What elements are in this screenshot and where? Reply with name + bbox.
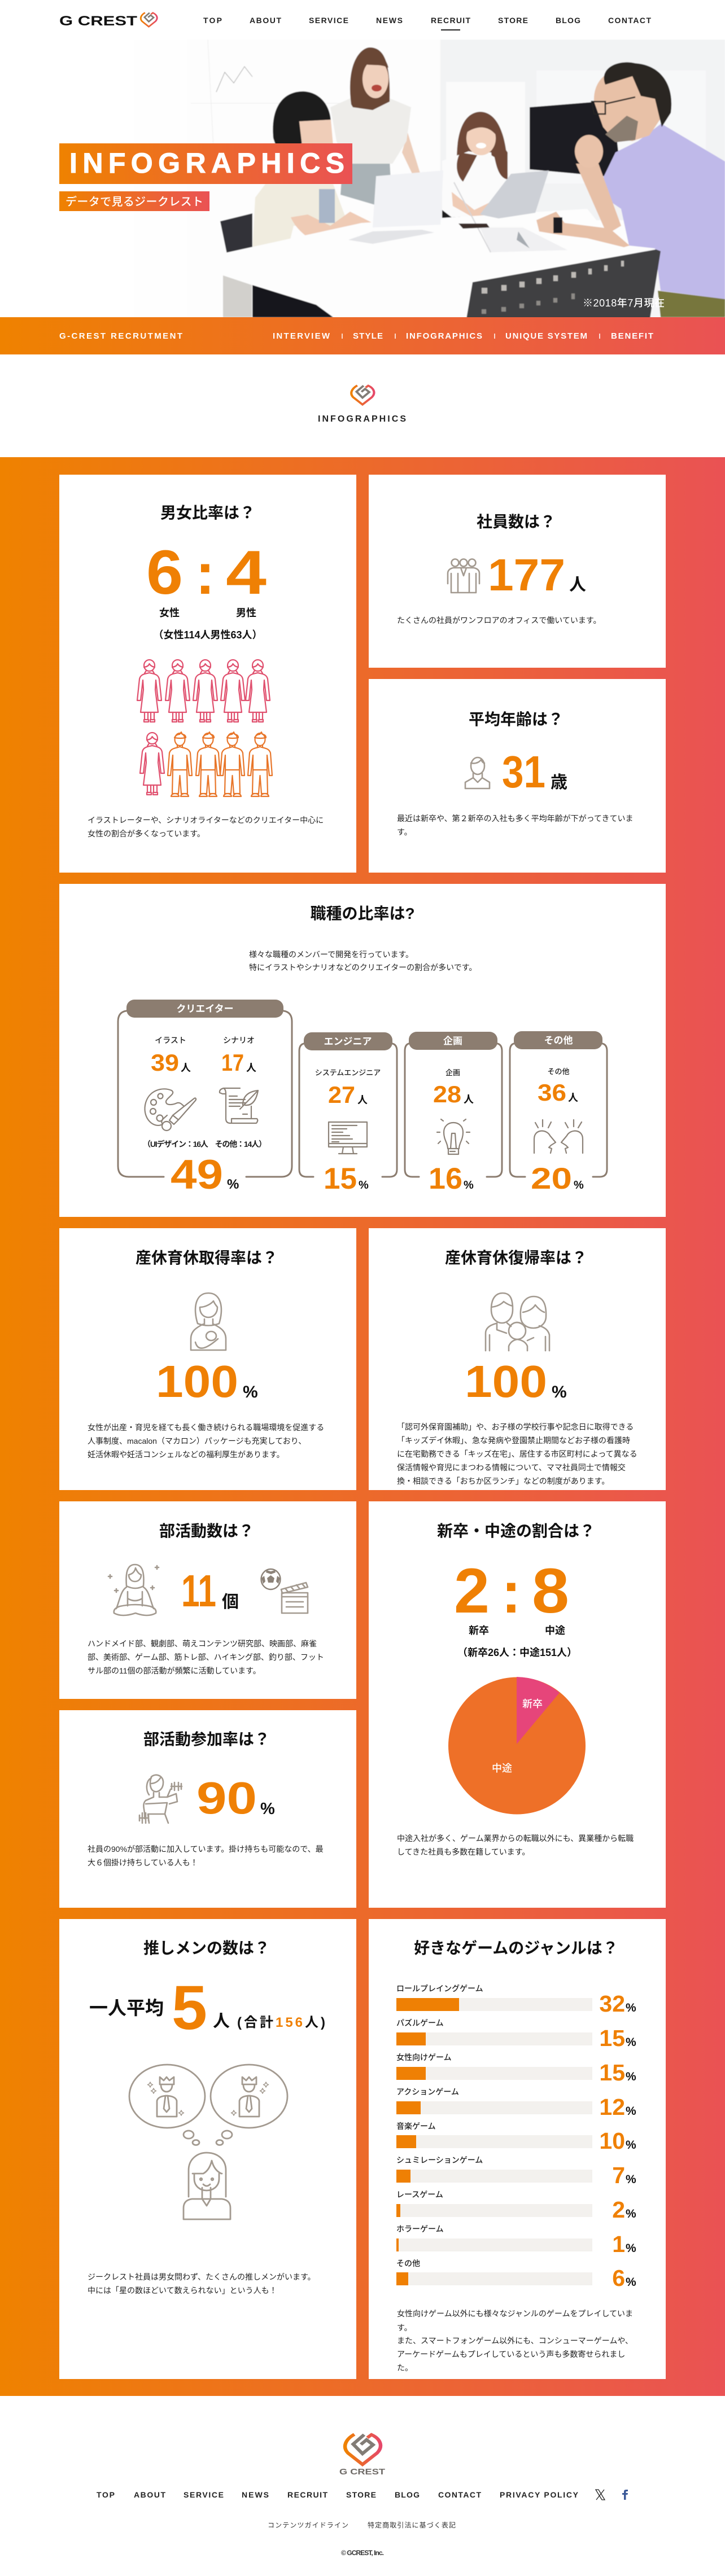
heading: 好きなゲームのジャンルは？ bbox=[414, 1939, 618, 1957]
pie chart: 中途 bbox=[492, 1763, 512, 1774]
bar: other: 6 bbox=[612, 2265, 625, 2291]
footer bbox=[97, 2434, 628, 2557]
header bar bbox=[0, 0, 725, 40]
column: engineers: 27 bbox=[328, 1081, 355, 1108]
panel: favourite idols count bbox=[59, 1919, 356, 2379]
recruitment sub navigation band bbox=[0, 317, 725, 354]
icon: soccer ball bbox=[261, 1569, 280, 1589]
heading: 新卒・中途の割合は？ bbox=[437, 1522, 595, 1540]
column: creators: 39 bbox=[151, 1049, 179, 1076]
bar: role playing bbox=[396, 1984, 636, 2017]
bar: music: 音楽ゲーム bbox=[396, 2122, 436, 2131]
column: creators: 人 bbox=[181, 1062, 191, 1074]
description: す。 bbox=[397, 2323, 412, 2332]
description: サル部の11個の部活動が頻繁に活動しています。 bbox=[88, 1666, 261, 1675]
global navigation: CONTACT bbox=[608, 16, 651, 25]
bar: action bbox=[396, 2087, 636, 2120]
description: 「キッズデイ休暇」、急な発病や登園禁止期間などお子様の看護時 bbox=[397, 1436, 630, 1445]
column: creators: 17 bbox=[221, 1049, 244, 1076]
average count text: 一人平均 bbox=[89, 1997, 164, 2018]
bar: horror: ホラーゲーム bbox=[396, 2224, 444, 2233]
footer logo bbox=[339, 2434, 385, 2477]
recruitment sub navigation band: INTERVIEW bbox=[273, 331, 330, 341]
seated man bbox=[252, 184, 345, 247]
bar: horror bbox=[396, 2224, 636, 2257]
footer links bbox=[268, 2521, 456, 2529]
bar: puzzle: パズルゲーム bbox=[396, 2018, 444, 2027]
bar: simulation: % bbox=[626, 2173, 636, 2186]
recruitment sub navigation band: BENEFIT bbox=[611, 331, 653, 341]
labels bbox=[153, 607, 263, 641]
column: planners: 企画 bbox=[443, 1035, 462, 1046]
description: 女性の割合が多くなっています。 bbox=[88, 829, 205, 838]
icon: palette and brush bbox=[145, 1089, 196, 1131]
hero subtitle bbox=[59, 191, 209, 211]
bar: racing: % bbox=[626, 2207, 636, 2220]
ratio 6:4: : bbox=[195, 541, 215, 607]
hero photo: team around a table bbox=[193, 40, 725, 317]
column: planners: 企画 bbox=[446, 1068, 460, 1077]
column: planners bbox=[405, 1032, 502, 1195]
bar: racing: 2 bbox=[612, 2197, 625, 2223]
heading: 産休育休取得率は？ bbox=[136, 1249, 278, 1267]
heading: 産休育休復帰率は？ bbox=[445, 1249, 587, 1267]
labels: 男性 bbox=[236, 607, 256, 619]
description bbox=[88, 1639, 324, 1675]
column: creators: シナリオ bbox=[223, 1036, 255, 1045]
bar: action: % bbox=[626, 2105, 636, 2118]
table bbox=[226, 209, 595, 255]
bar: action: 12 bbox=[599, 2094, 625, 2120]
description: 大６個掛け持ちしている人も！ bbox=[88, 1858, 198, 1867]
panel: job type ratio bbox=[59, 884, 666, 1217]
icon: meditating woman bbox=[108, 1565, 159, 1615]
description: ジークレスト社員は男女問わず、たくさんの推しメンがいます。 bbox=[88, 2272, 316, 2281]
footer logo: G CREST bbox=[339, 2467, 385, 2477]
recruitment sub navigation band: G-CREST RECRUTMENT bbox=[59, 331, 182, 341]
column: others: 20 bbox=[531, 1162, 572, 1195]
column: others: その他 bbox=[547, 1067, 570, 1076]
description bbox=[88, 2272, 316, 2295]
bar: role playing: % bbox=[626, 2001, 636, 2014]
description: 人事制度、macalon（マカロン）パッケージも充実しており、 bbox=[88, 1436, 306, 1445]
description: 特にイラストやシナリオなどのクリエイターの割合が多いです。 bbox=[249, 963, 477, 972]
description: 換・相談できる「おちか区ランチ」などの制度があります。 bbox=[397, 1477, 609, 1486]
ratio 6:4: 6 bbox=[146, 538, 183, 607]
heading: 職種の比率は? bbox=[310, 905, 415, 922]
bar: role playing: ロールプレイングゲーム bbox=[396, 1984, 483, 1993]
footer navigation: STORE bbox=[346, 2490, 376, 2499]
hero subtitle: データで見るジークレスト bbox=[65, 195, 203, 208]
description bbox=[397, 1834, 634, 1856]
panel: gender ratio bbox=[59, 475, 356, 873]
ratio 2:8: 2 bbox=[454, 1556, 490, 1626]
column: creators bbox=[118, 1000, 292, 1198]
icon: person bbox=[465, 757, 490, 788]
bar: simulation: シュミレーションゲーム bbox=[396, 2156, 483, 2165]
description: アーケードゲームもプレイしているという声も多数寄せられまし bbox=[397, 2350, 625, 2359]
value 100%: 100 bbox=[156, 1356, 238, 1407]
count 11: 11 bbox=[181, 1566, 216, 1616]
panel: number of clubs bbox=[59, 1501, 356, 1699]
footer navigation: CONTACT bbox=[438, 2490, 481, 2499]
description: また、スマートフォンゲーム以外にも、コンシューマーゲームや、 bbox=[397, 2336, 633, 2345]
description: ハンドメイド部、観劇部、萌えコンテンツ研究部、映画部、麻雀 bbox=[88, 1639, 317, 1648]
icon: scroll and quill bbox=[220, 1088, 258, 1123]
description: 中途入社が多く、ゲーム業界からの転職以外にも、異業種から転職 bbox=[397, 1834, 634, 1843]
icon: woman with dumbbells bbox=[139, 1775, 182, 1823]
age 31: 歳 bbox=[551, 773, 567, 792]
column: others: その他 bbox=[544, 1035, 573, 1046]
bar: other: その他 bbox=[396, 2259, 420, 2268]
icon: two people talking bbox=[534, 1120, 583, 1153]
column: planners: 16 bbox=[429, 1162, 462, 1195]
column: creators: % bbox=[227, 1177, 239, 1192]
description: た。 bbox=[397, 2363, 413, 2372]
description: してきた社員も多数在籍しています。 bbox=[397, 1847, 530, 1856]
value 90%: % bbox=[260, 1800, 275, 1818]
bar: puzzle bbox=[396, 2018, 636, 2051]
description: たくさんの社員がワンフロアのオフィスで働いています。 bbox=[397, 616, 601, 625]
global navigation: BLOG bbox=[556, 16, 580, 25]
footer navigation: TOP bbox=[97, 2490, 115, 2499]
bar: for women: 女性向けゲーム bbox=[396, 2053, 452, 2062]
average count text: (合計156人) bbox=[237, 2015, 325, 2030]
ratio 6:4: 4 bbox=[226, 538, 267, 607]
heading: 平均年齢は？ bbox=[469, 711, 564, 728]
description: 社員の90%が部活動に加入しています。掛け持ちも可能なので、最 bbox=[88, 1845, 324, 1854]
left chair bbox=[220, 213, 252, 254]
global navigation: TOP bbox=[203, 16, 222, 25]
description: イラストレーターや、シナリオライターなどのクリエイター中心に bbox=[88, 816, 324, 825]
column: creators: クリエイター bbox=[176, 1004, 234, 1014]
average count text: 人 bbox=[213, 2012, 230, 2031]
bar: horror: 1 bbox=[612, 2231, 625, 2257]
labels bbox=[457, 1625, 577, 1658]
column: planners: 人 bbox=[464, 1094, 474, 1105]
footer navigation: ABOUT bbox=[134, 2490, 165, 2499]
recruitment sub navigation band: INFOGRAPHICS bbox=[406, 331, 482, 341]
panel: average age bbox=[369, 679, 666, 873]
average count text bbox=[89, 1973, 325, 2043]
bar: music bbox=[396, 2122, 636, 2154]
description bbox=[88, 816, 324, 838]
icon: light bulb bbox=[437, 1119, 470, 1154]
column: creators: イラスト bbox=[155, 1036, 186, 1045]
icon: X social bbox=[596, 2490, 605, 2500]
global navigation bbox=[203, 16, 651, 30]
description bbox=[88, 1845, 324, 1867]
description: 中には「星の数ほどいて数えられない」という人も！ bbox=[88, 2286, 277, 2295]
column: creators: 49 bbox=[171, 1152, 223, 1198]
bar: for women: 15 bbox=[599, 2060, 625, 2086]
labels: 新卒 bbox=[469, 1625, 489, 1636]
column: engineers bbox=[299, 1032, 397, 1195]
description bbox=[249, 950, 477, 972]
description: 最近は新卒や、第２新卒の入社も多く平均年齢が下がってきていま bbox=[397, 814, 633, 823]
description: 保活情報や育児にまつわる情報について、ママ社員同士で情報交 bbox=[397, 1463, 626, 1472]
icon: thought bubbles with crowned idols bbox=[129, 2065, 287, 2219]
icon: family bbox=[486, 1293, 549, 1351]
bar: other bbox=[396, 2259, 636, 2291]
global navigation: RECRUIT bbox=[431, 16, 470, 25]
icon: clapperboard bbox=[281, 1583, 308, 1613]
global navigation: SERVICE bbox=[309, 16, 348, 25]
column: engineers: 15 bbox=[324, 1162, 357, 1195]
footer navigation: RECRUIT bbox=[287, 2490, 327, 2499]
labels: 女性 bbox=[159, 607, 180, 619]
panel: return from parental leave bbox=[369, 1228, 666, 1490]
footer navigation: BLOG bbox=[395, 2490, 420, 2499]
bar: for women bbox=[396, 2053, 636, 2086]
standing woman bbox=[340, 163, 391, 205]
count 11: 個 bbox=[222, 1593, 239, 1611]
column: engineers: システムエンジニア bbox=[315, 1068, 381, 1077]
panel: number of employees bbox=[369, 475, 666, 668]
panel: club participation rate bbox=[59, 1710, 356, 1908]
panel: parental leave take-up bbox=[59, 1228, 356, 1490]
footer links: コンテンツガイドライン bbox=[268, 2521, 348, 2529]
footer navigation: SERVICE bbox=[184, 2490, 224, 2499]
heading: 社員数は？ bbox=[477, 513, 556, 531]
description bbox=[397, 2309, 633, 2372]
panel: favourite game genres bbox=[369, 1919, 666, 2379]
description: 妊活休暇や妊活コンシェルなどの福利厚生があります。 bbox=[88, 1450, 285, 1459]
column: creators: （UIデザイン：16人 その他：14人） bbox=[143, 1140, 267, 1149]
global navigation: ABOUT bbox=[250, 16, 281, 25]
column: creators: 人 bbox=[246, 1062, 256, 1074]
column: others: 人 bbox=[568, 1092, 578, 1103]
value 100%: 100 bbox=[465, 1356, 547, 1407]
column: planners: % bbox=[464, 1179, 474, 1191]
icon: monitor bbox=[329, 1122, 367, 1154]
panel: new graduate vs mid-career ratio bbox=[369, 1501, 666, 1908]
section heading: INFOGRAPHICS with logo mark bbox=[318, 385, 406, 424]
labels: （女性114人男性63人） bbox=[153, 629, 263, 641]
average count text: 5 bbox=[172, 1973, 207, 2043]
bar: music: 10 bbox=[599, 2128, 625, 2154]
section heading: INFOGRAPHICS with logo mark: INFOGRAPHICS bbox=[318, 414, 406, 424]
bar: role playing: 32 bbox=[599, 1991, 625, 2017]
heading: 部活動数は？ bbox=[159, 1522, 254, 1540]
description: に在宅勤務できる「キッズ在宅」、居住する市区町村によって異なる bbox=[397, 1449, 637, 1458]
value 90%: 90 bbox=[196, 1773, 257, 1823]
column: others: % bbox=[574, 1179, 584, 1191]
heading: 部活動参加率は？ bbox=[143, 1731, 270, 1748]
value 100%: % bbox=[243, 1383, 258, 1401]
value 90% bbox=[196, 1773, 275, 1823]
ratio 2:8: 8 bbox=[532, 1556, 569, 1626]
global navigation: STORE bbox=[498, 16, 528, 25]
logo: G CREST: G CREST bbox=[59, 14, 137, 29]
description: 「認可外保育園補助」や、お子様の学校行事や記念日に取得できる bbox=[397, 1422, 634, 1431]
laptops bbox=[480, 170, 549, 218]
icon: ten people bbox=[137, 660, 272, 796]
age 31: 31 bbox=[502, 747, 545, 797]
count 177: 人 bbox=[569, 576, 586, 594]
column: engineers: % bbox=[359, 1179, 369, 1191]
seated woman bbox=[442, 210, 455, 218]
icon: Facebook bbox=[622, 2490, 628, 2500]
logo: G CREST bbox=[59, 12, 157, 29]
copyright: © GCREST, Inc. bbox=[341, 2549, 384, 2557]
footer links: 特定商取引法に基づく表記 bbox=[368, 2521, 456, 2529]
labels: （新卒26人：中途151人） bbox=[457, 1647, 577, 1658]
value 100%: % bbox=[552, 1383, 567, 1401]
column: engineers: エンジニア bbox=[324, 1036, 372, 1047]
bar: music: % bbox=[626, 2139, 636, 2152]
description: 女性向けゲーム以外にも様々なジャンルのゲームをプレイしていま bbox=[397, 2309, 633, 2318]
description: 様々な職種のメンバーで開発を行っています。 bbox=[249, 950, 413, 959]
bar: simulation bbox=[396, 2156, 636, 2188]
column: planners: 28 bbox=[433, 1081, 461, 1107]
foreground chair bbox=[466, 249, 661, 319]
footer navigation bbox=[97, 2490, 579, 2499]
footer navigation: PRIVACY POLICY bbox=[500, 2490, 579, 2499]
pie chart bbox=[448, 1677, 586, 1814]
heading: 男女比率は？ bbox=[160, 504, 255, 522]
icon: mother and baby bbox=[191, 1293, 226, 1350]
global navigation: NEWS bbox=[376, 16, 403, 25]
man with glasses bbox=[596, 124, 725, 299]
recruitment sub navigation band: UNIQUE SYSTEM bbox=[505, 331, 587, 341]
bar chart bbox=[396, 1984, 636, 2291]
description: 女性が出産・育児を経ても長く働き続けられる職場環境を促進する bbox=[88, 1423, 324, 1432]
pie chart: 新卒 bbox=[522, 1698, 543, 1710]
recruitment sub navigation band: STYLE bbox=[353, 331, 383, 341]
bar: for women: % bbox=[626, 2070, 636, 2083]
ratio 2:8 bbox=[454, 1556, 569, 1626]
column: others: 36 bbox=[538, 1079, 566, 1106]
date note: ※2018年7月現在 bbox=[583, 297, 665, 309]
heading: 推しメンの数は？ bbox=[143, 1939, 270, 1957]
bar: simulation: 7 bbox=[612, 2162, 625, 2188]
count 177: 177 bbox=[488, 550, 565, 600]
column: others bbox=[510, 1031, 607, 1195]
orange gradient background bbox=[0, 457, 725, 2396]
footer navigation: NEWS bbox=[242, 2490, 269, 2499]
icon: group of staff bbox=[448, 559, 479, 593]
hero title: INFOGRAPHICS: INFOGRAPHICS bbox=[69, 147, 344, 179]
description bbox=[397, 1422, 637, 1486]
monitor bbox=[530, 100, 621, 178]
description: す。 bbox=[397, 827, 412, 836]
description bbox=[397, 814, 633, 836]
bar: puzzle: 15 bbox=[599, 2025, 625, 2051]
ratio 6:4 bbox=[146, 538, 267, 607]
bar: racing: レースゲーム bbox=[396, 2190, 443, 2199]
bar: horror: % bbox=[626, 2242, 636, 2255]
column: engineers: 人 bbox=[357, 1094, 368, 1106]
bar: other: % bbox=[626, 2276, 636, 2289]
bar: puzzle: % bbox=[626, 2036, 636, 2049]
bar: action: アクションゲーム bbox=[396, 2087, 459, 2096]
labels: 中途 bbox=[545, 1625, 565, 1636]
description bbox=[88, 1423, 324, 1459]
description: 部、美術部、ゲーム部、筋トレ部、ハイキング部、釣り部、フット bbox=[88, 1653, 324, 1662]
ratio 2:8: : bbox=[501, 1560, 521, 1626]
bar: racing bbox=[396, 2190, 636, 2223]
